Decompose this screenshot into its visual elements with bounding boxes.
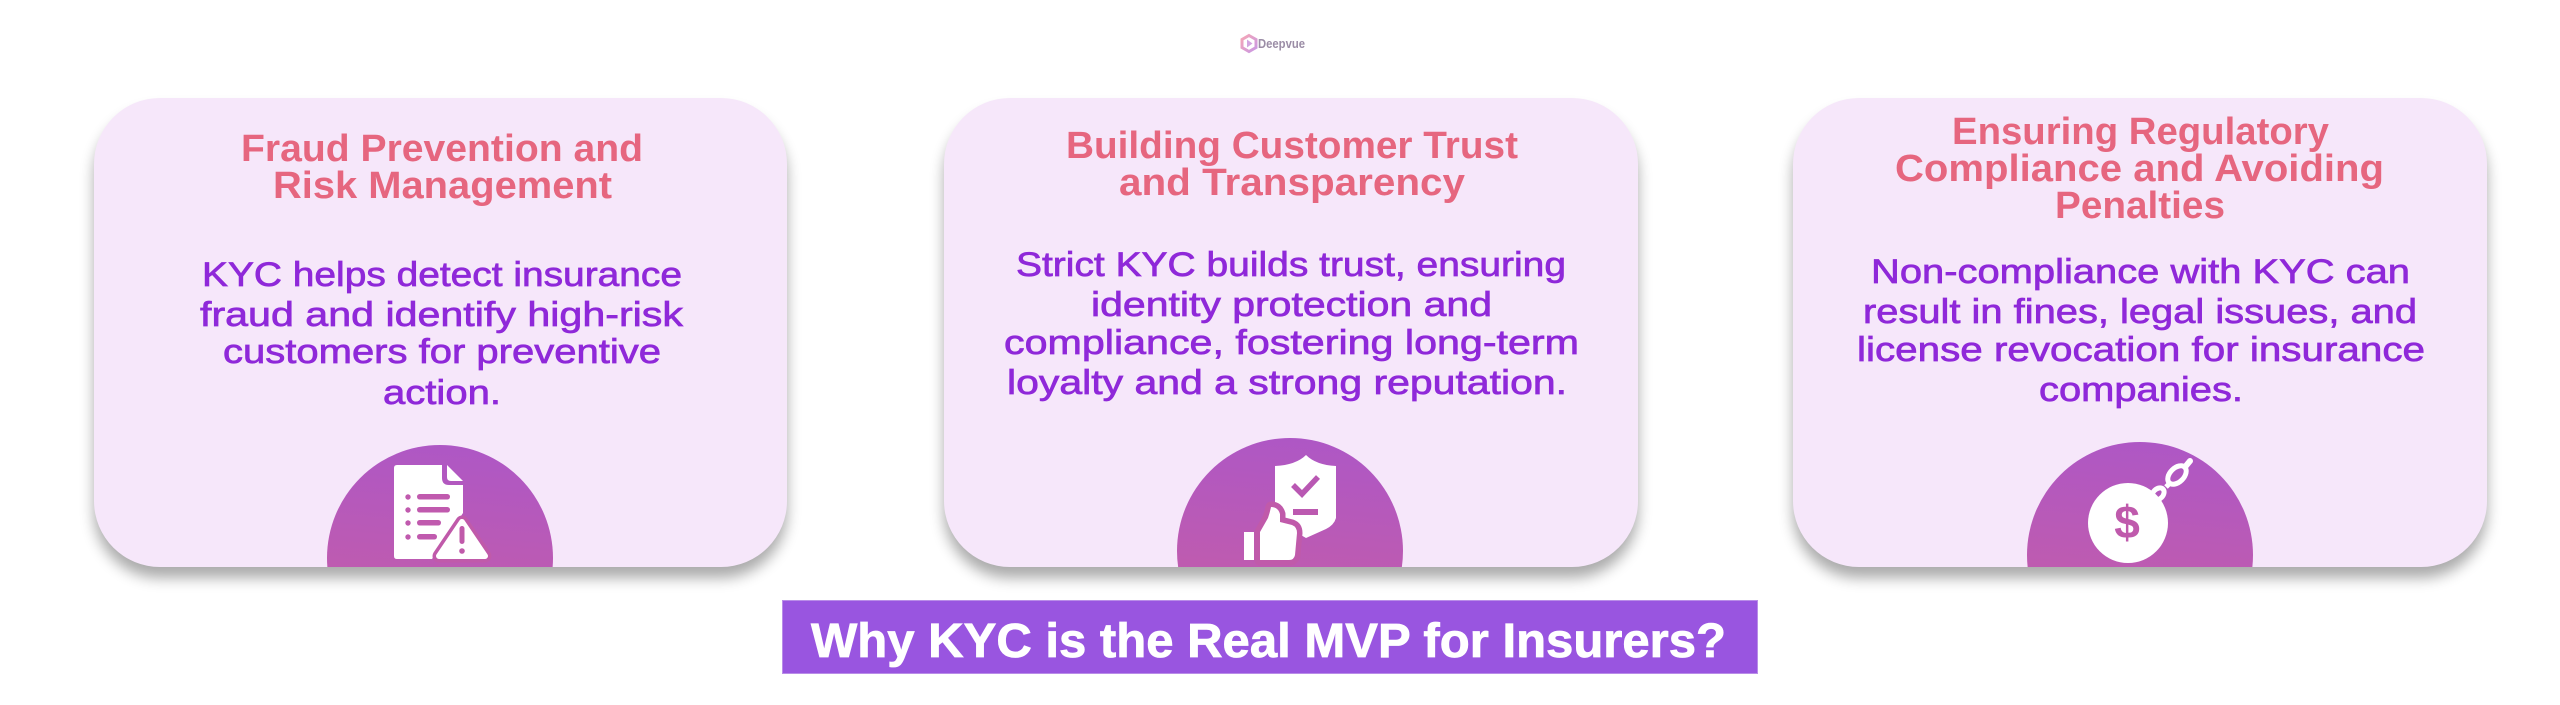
body text: result in fines, legal issues, and xyxy=(1863,293,2417,331)
icon: wrecking ball with dollar: $ xyxy=(2114,496,2140,548)
body text: license revocation for insurance xyxy=(1857,331,2425,369)
heading xyxy=(1066,125,1518,204)
title: Why KYC is the Real MVP for Insurers? xyxy=(811,615,1726,668)
heading: Compliance and Avoiding xyxy=(1895,148,2384,190)
heading xyxy=(1895,111,2384,227)
title banner xyxy=(782,600,1758,674)
body text: KYC helps detect insurance xyxy=(202,256,682,294)
card shadow xyxy=(1793,110,2487,578)
panel: fraud prevention xyxy=(86,98,796,586)
card background xyxy=(944,98,1638,567)
body text: loyalty and a strong reputation. xyxy=(1007,364,1567,402)
heading: Penalties xyxy=(2055,185,2225,227)
body text xyxy=(200,256,684,412)
heading: Ensuring Regulatory xyxy=(1952,111,2329,153)
body text: Strict KYC builds trust, ensuring xyxy=(1016,246,1566,284)
icon: hexagon logo mark xyxy=(1242,36,1256,52)
logo: Deepvue xyxy=(1242,36,1305,52)
card shadow xyxy=(944,110,1638,578)
heading xyxy=(241,128,643,207)
body text: action. xyxy=(383,374,501,412)
card background xyxy=(94,98,787,567)
panel: customer trust xyxy=(936,98,1646,586)
panel: regulatory compliance xyxy=(1784,98,2496,586)
icon: wrecking ball with dollar xyxy=(2027,442,2253,567)
heading: and Transparency xyxy=(1119,162,1465,204)
card background xyxy=(1793,98,2487,567)
body text xyxy=(1004,246,1579,402)
icon: shield with thumbs up xyxy=(1177,438,1403,567)
body text: identity protection and xyxy=(1091,286,1492,324)
icon: document with warning xyxy=(327,445,553,567)
heading: Risk Management xyxy=(273,165,612,207)
banner background xyxy=(782,600,1758,674)
body text: Non-compliance with KYC can xyxy=(1871,253,2410,291)
body text: compliance, fostering long-term xyxy=(1004,324,1579,362)
heading: Fraud Prevention and xyxy=(241,128,643,170)
body text: companies. xyxy=(2039,371,2243,409)
heading: Building Customer Trust xyxy=(1066,125,1518,167)
body text xyxy=(1857,253,2425,409)
body text: customers for preventive xyxy=(223,333,661,371)
body text: fraud and identify high-risk xyxy=(200,296,684,334)
logo wordmark: Deepvue xyxy=(1258,36,1305,51)
card shadow xyxy=(94,110,787,578)
